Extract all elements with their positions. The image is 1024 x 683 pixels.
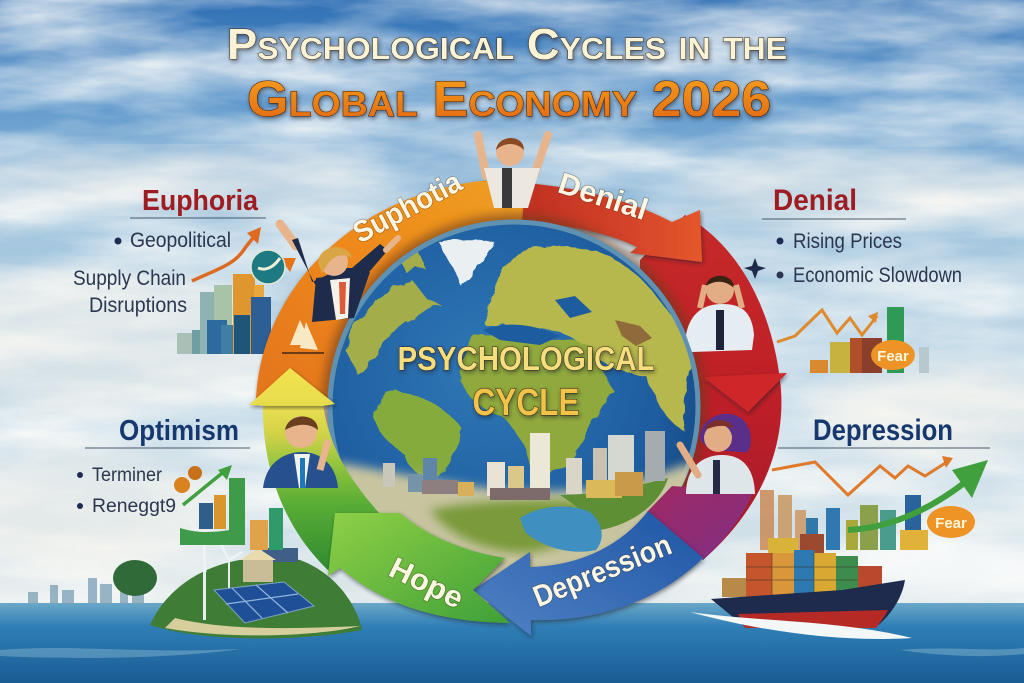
- arrow head: yellow: [249, 368, 335, 406]
- landscape and city at bottom of globe: [335, 431, 700, 590]
- island with wind turbines and solar panels: [113, 520, 362, 638]
- title: [227, 20, 787, 127]
- fear badge: [927, 506, 975, 538]
- icon: denial sparkle: [744, 258, 766, 279]
- sea: [0, 603, 1024, 683]
- segment: dark red band: [640, 215, 781, 560]
- optimism chart: [174, 465, 283, 550]
- center label: [398, 340, 654, 424]
- right chart: denial: [777, 307, 929, 373]
- center label: CYCLE: [472, 382, 580, 424]
- person left optimism: [263, 416, 338, 488]
- person right depression: [680, 414, 755, 494]
- segment: denial red arrow: [522, 183, 702, 262]
- fear badge: Fear: [877, 348, 909, 365]
- right chart: depression: [760, 456, 988, 550]
- title line 1: Psychological Cycles in the: [227, 20, 787, 69]
- text: denial list: Economic Slowdown: [793, 264, 962, 287]
- text: denial list: Rising Prices: [793, 230, 902, 253]
- heading: denial: Denial: [773, 184, 857, 217]
- segment: purple band: [647, 486, 753, 560]
- heading: depression: Depression: [813, 414, 953, 447]
- person left euphoria: [280, 224, 398, 322]
- ring labels: Suphotia: [348, 165, 468, 250]
- cycle ring back: [256, 180, 787, 560]
- cargo ship: [690, 534, 912, 639]
- continents: [345, 239, 692, 478]
- fear badge: [871, 340, 915, 370]
- globe: [322, 214, 706, 598]
- orange band icons: [282, 320, 324, 354]
- text: euphoria list: Supply Chain: [73, 267, 186, 290]
- distant skyline left: [28, 575, 144, 604]
- heading: optimism: Optimism: [119, 415, 239, 447]
- person top: [478, 135, 548, 208]
- person right denial: [686, 276, 754, 352]
- ring labels: Hope: [384, 552, 468, 615]
- text: euphoria list: Geopolitical: [130, 229, 231, 252]
- center label: PSYCHOLOGICAL: [398, 340, 654, 377]
- ring labels: Denial: [554, 167, 652, 227]
- arrow head: dark red: [703, 373, 787, 412]
- ring labels: [348, 165, 676, 615]
- ring labels: Depression: [529, 529, 676, 614]
- segment: euphoria orange: [256, 180, 532, 400]
- text: euphoria list: Disruptions: [89, 294, 187, 317]
- fear badge: Fear: [935, 515, 967, 532]
- segment: blue depression arrow: [473, 511, 703, 636]
- text: optimism list: Terminer: [92, 465, 163, 486]
- title line 2: Global Economy 2026: [247, 71, 771, 127]
- text: euphoria list: [73, 229, 231, 317]
- text: optimism list: [77, 465, 176, 517]
- segment: hope green arrow: [328, 513, 510, 623]
- text: optimism list: Reneggt9: [92, 496, 176, 517]
- heading: euphoria: Euphoria: [142, 185, 259, 217]
- segment: optimism green shaft: [263, 405, 380, 572]
- left chart: euphoria: [177, 227, 296, 354]
- text: denial list: [776, 230, 962, 287]
